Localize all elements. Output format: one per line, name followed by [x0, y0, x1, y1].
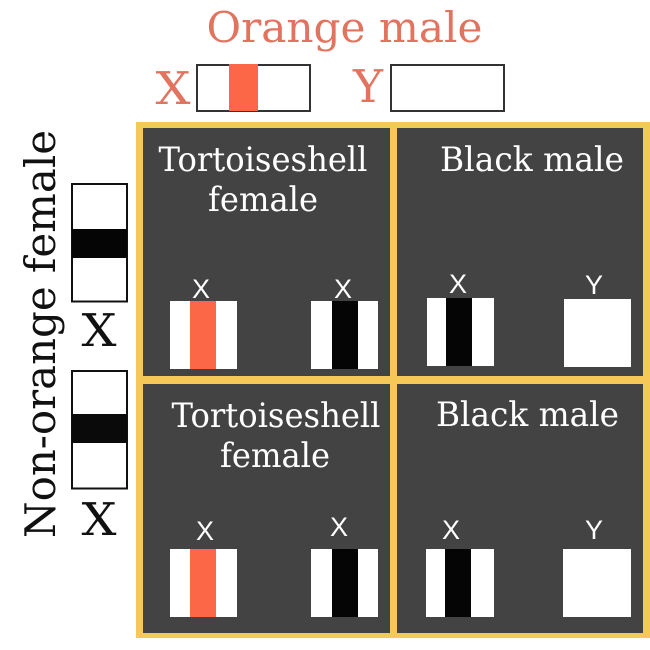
female X chromosome top: X — [82, 304, 116, 357]
male X chromosome — [156, 62, 310, 115]
cell: top-right black male: Y — [585, 270, 603, 300]
title: Orange male: Orange male — [206, 3, 482, 52]
cell: bottom-left tortoiseshell female: Tortoiseshell — [172, 396, 380, 436]
cell: bottom-left tortoiseshell female — [143, 384, 390, 633]
cell: top-left tortoiseshell female: Tortoiseshell — [158, 140, 368, 180]
cell: top-left tortoiseshell female: female — [208, 180, 318, 220]
cell: bottom-right black male: X — [442, 515, 460, 545]
male Y chromosome — [352, 60, 504, 113]
cell: bottom-left tortoiseshell female: X — [330, 512, 348, 542]
cell: top-right black male: Black male — [440, 140, 624, 180]
side title: Non-orange female: Non-orange female — [16, 130, 65, 538]
cell: top-left tortoiseshell female: X — [192, 274, 210, 304]
cell: bottom-right black male — [397, 384, 643, 633]
female X chromosome bottom — [72, 371, 127, 546]
cell: bottom-right black male: Black male — [436, 395, 619, 435]
male X chromosome: X — [156, 62, 190, 115]
cell: top-right black male: X — [449, 269, 467, 299]
cell: top-left tortoiseshell female — [143, 128, 390, 376]
cell: bottom-left tortoiseshell female: female — [220, 436, 330, 476]
cell: top-left tortoiseshell female: X — [334, 274, 352, 304]
male Y chromosome: Y — [352, 60, 384, 113]
female X chromosome top — [72, 184, 127, 357]
cell: top-right black male — [397, 128, 643, 376]
female X chromosome bottom: X — [82, 493, 116, 546]
cell: bottom-left tortoiseshell female: X — [196, 516, 214, 546]
punnett square — [136, 122, 650, 638]
cell: bottom-right black male: Y — [585, 515, 603, 545]
